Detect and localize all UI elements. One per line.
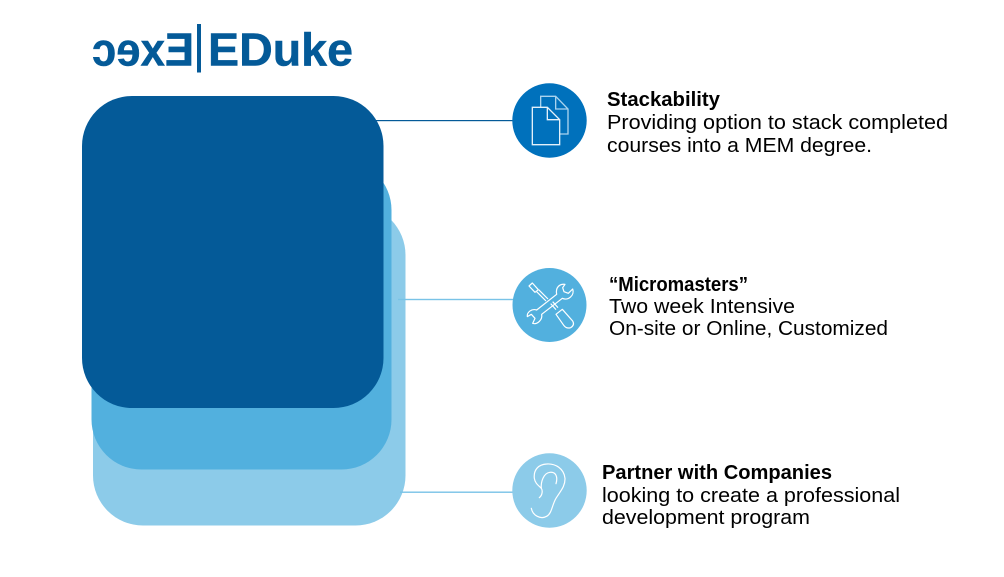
text block: Partner with Companies	[602, 462, 900, 529]
icon background	[512, 268, 586, 342]
logo text: mirrored Exec: Exec	[92, 24, 194, 76]
connector: light	[400, 492, 514, 493]
stacked card: medium	[92, 160, 392, 470]
heading: “Micromasters”	[609, 274, 748, 296]
body line 2: courses into a MEM degree.	[607, 135, 872, 157]
logo: ExecEDuke	[92, 24, 353, 76]
text block: Stackability	[607, 89, 948, 157]
tools glyph	[527, 283, 573, 328]
body line 1: Providing option to stack completed	[607, 112, 948, 134]
body line 2: On-site or Online, Customized	[609, 318, 888, 340]
text block: Micromasters	[609, 274, 888, 340]
body line 1: looking to create a professional	[602, 485, 900, 507]
icon: tools	[512, 268, 586, 342]
body line 1: Two week Intensive	[609, 296, 795, 318]
icon background	[512, 83, 587, 158]
heading: Stackability	[607, 89, 721, 111]
document glyphs	[532, 96, 568, 145]
logo divider	[197, 24, 201, 72]
icon background	[512, 453, 587, 528]
heading: Partner with Companies	[602, 462, 832, 484]
stacked card: dark	[82, 96, 384, 408]
body line 2: development program	[602, 507, 810, 529]
connector: medium	[398, 299, 514, 300]
ear glyph	[531, 464, 565, 518]
connector: dark	[375, 120, 514, 121]
icon: documents	[512, 83, 587, 158]
logo text: EDuke: EDuke	[208, 24, 353, 76]
icon: ear	[512, 453, 587, 528]
stacked card: light	[93, 205, 406, 526]
